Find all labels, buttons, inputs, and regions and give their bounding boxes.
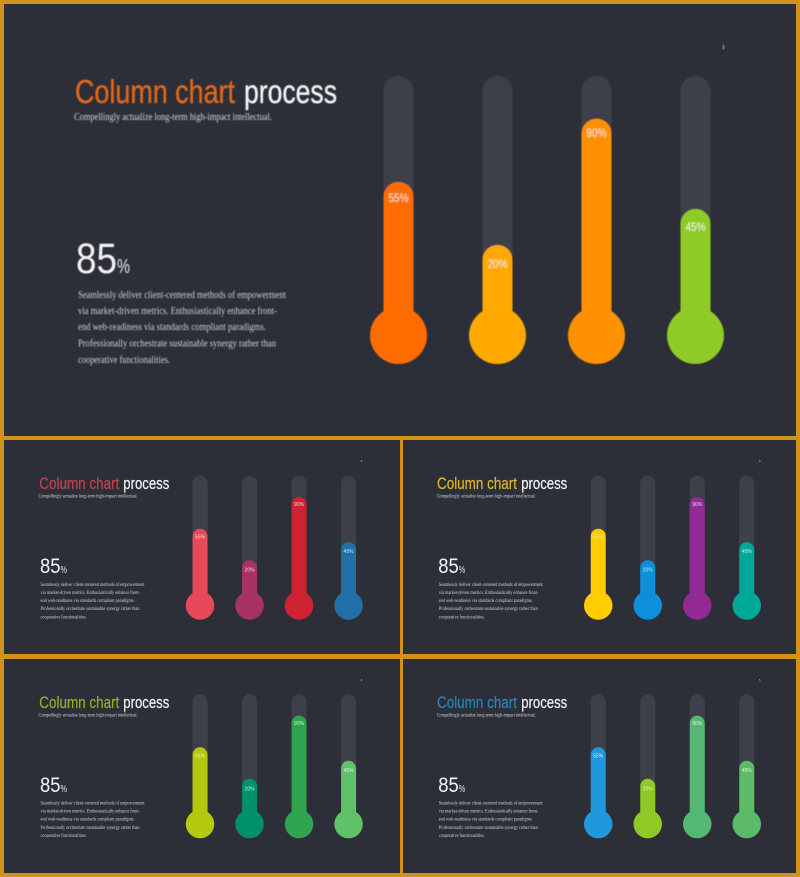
body text: cooperative functionalities.	[78, 355, 170, 366]
body text: cooperative functionalities.	[41, 834, 87, 839]
body text: cooperative functionalities.	[439, 615, 485, 620]
thermometer 20%: 20%	[245, 786, 255, 792]
title: Column chart	[437, 694, 517, 712]
thermometer 45%: 45%	[742, 549, 752, 555]
big number: %	[61, 784, 67, 795]
panel: main slide, orange theme	[4, 4, 796, 436]
big number: 85	[40, 773, 61, 797]
title: Column chart	[39, 475, 120, 493]
thermometer 45%	[732, 476, 761, 620]
body text: end web-readiness via standards compliant paradigms.	[439, 818, 533, 823]
thermometer 90%	[285, 476, 313, 620]
body text: end web-readiness via standards compliant paradigms.	[78, 322, 266, 333]
page number: 3	[759, 459, 761, 463]
thermometer 20%: 20%	[643, 568, 653, 574]
thermometer 55%	[584, 476, 612, 620]
thermometer 20%	[634, 476, 662, 620]
thermometer 20%	[235, 694, 264, 838]
thermometer 45%	[334, 694, 363, 838]
thermometer 55%: 55%	[388, 193, 408, 205]
body text: via market-driven metrics. Enthusiastically enhance front-	[41, 591, 140, 596]
big number: 85	[438, 773, 459, 797]
body text: Seamlessly deliver client-centered methods of empowerment	[439, 583, 543, 588]
big number: 85	[40, 554, 61, 578]
thermometer 90%	[285, 694, 313, 838]
panel: blue and green slide	[403, 659, 796, 873]
body text: cooperative functionalities.	[439, 834, 485, 839]
subtitle: Compellingly actualize long-term high-impact intellectual.	[74, 112, 272, 123]
thermometer 55%: 55%	[195, 535, 205, 541]
body text: Professionally orchestrate sustainable synergy rather than	[439, 607, 538, 612]
body text	[439, 583, 543, 620]
big number: %	[459, 565, 465, 576]
body text	[41, 802, 145, 839]
body text: end web-readiness via standards compliant paradigms.	[41, 818, 135, 823]
thermometer 45%	[334, 476, 363, 620]
thermometer 55%	[584, 694, 612, 838]
thermometer 90%: 90%	[294, 502, 304, 508]
page number: 5	[759, 678, 761, 682]
panel: yellow and purple slide	[403, 440, 796, 654]
thermometer 45%	[732, 694, 761, 838]
thermometer 90%: 90%	[586, 128, 606, 140]
body text: Seamlessly deliver client-centered methods of empowerment	[41, 583, 145, 588]
title: Column chart	[39, 694, 120, 712]
body text: via market-driven metrics. Enthusiastically enhance front-	[78, 306, 277, 317]
thermometer 55%	[186, 476, 214, 620]
body text	[439, 802, 543, 839]
page number: 4	[361, 678, 363, 682]
big number: 85	[438, 554, 459, 578]
thermometer 90%: 90%	[692, 721, 702, 727]
body text: Seamlessly deliver client-centered methods of empowerment	[78, 290, 286, 301]
thermometer 55%	[370, 76, 427, 364]
thermometer 90%: 90%	[692, 502, 702, 508]
thermometer 20%	[634, 694, 662, 838]
body text: Seamlessly deliver client-centered methods of empowerment	[41, 802, 145, 807]
body text: via market-driven metrics. Enthusiastically enhance front-	[41, 810, 140, 815]
thermometer 55%: 55%	[195, 753, 205, 759]
panel: lime and green slide	[4, 659, 400, 873]
title: process	[521, 694, 567, 712]
thermometer 45%: 45%	[344, 549, 354, 555]
body text: Professionally orchestrate sustainable synergy rather than	[41, 607, 140, 612]
subtitle: Compellingly actualize long-term high-impact intellectual.	[437, 495, 536, 500]
big number: %	[61, 565, 67, 576]
thermometer 45%: 45%	[686, 222, 706, 234]
thermometer 90%	[568, 76, 625, 364]
thermometer 20%: 20%	[643, 786, 653, 792]
thermometer 55%	[186, 694, 214, 838]
thermometer 90%	[683, 694, 712, 838]
big number: %	[459, 784, 465, 795]
thermometer 55%: 55%	[593, 753, 603, 759]
title: process	[123, 475, 169, 493]
subtitle: Compellingly actualize long-term high-impact intellectual.	[437, 713, 536, 718]
thermometer 20%	[469, 76, 526, 364]
page number: 2	[361, 459, 363, 463]
thermometer 20%: 20%	[245, 568, 255, 574]
subtitle: Compellingly actualize long-term high-impact intellectual.	[39, 713, 138, 718]
body text: end web-readiness via standards compliant paradigms.	[439, 599, 533, 604]
body text: via market-driven metrics. Enthusiastically enhance front-	[439, 591, 539, 596]
body text: end web-readiness via standards compliant paradigms.	[41, 599, 135, 604]
big number: 85	[76, 235, 117, 283]
body text: Professionally orchestrate sustainable synergy rather than	[439, 826, 538, 831]
title: Column chart	[437, 475, 517, 493]
page number: 1	[722, 45, 725, 51]
thermometer 90%	[683, 476, 712, 620]
body text	[41, 583, 145, 620]
title: process	[521, 475, 567, 493]
thermometer 45%: 45%	[742, 768, 752, 774]
thermometer 45%: 45%	[344, 768, 354, 774]
thermometer 45%	[667, 76, 724, 364]
thermometer 20%	[235, 476, 264, 620]
panel: red and blue slide	[4, 440, 400, 654]
body text: via market-driven metrics. Enthusiastically enhance front-	[439, 810, 539, 815]
body text: Seamlessly deliver client-centered methods of empowerment	[439, 802, 543, 807]
subtitle: Compellingly actualize long-term high-impact intellectual.	[39, 495, 138, 500]
body text: cooperative functionalities.	[41, 615, 87, 620]
title: process	[244, 73, 337, 110]
body text: Professionally orchestrate sustainable synergy rather than	[78, 338, 276, 350]
thermometer 55%: 55%	[593, 535, 603, 541]
big number: %	[117, 256, 130, 278]
thermometer 20%: 20%	[488, 259, 508, 271]
body text	[78, 290, 286, 366]
title: Column chart	[75, 73, 235, 110]
body text: Professionally orchestrate sustainable synergy rather than	[41, 826, 140, 831]
thermometer 90%: 90%	[294, 721, 304, 727]
title: process	[123, 694, 169, 712]
